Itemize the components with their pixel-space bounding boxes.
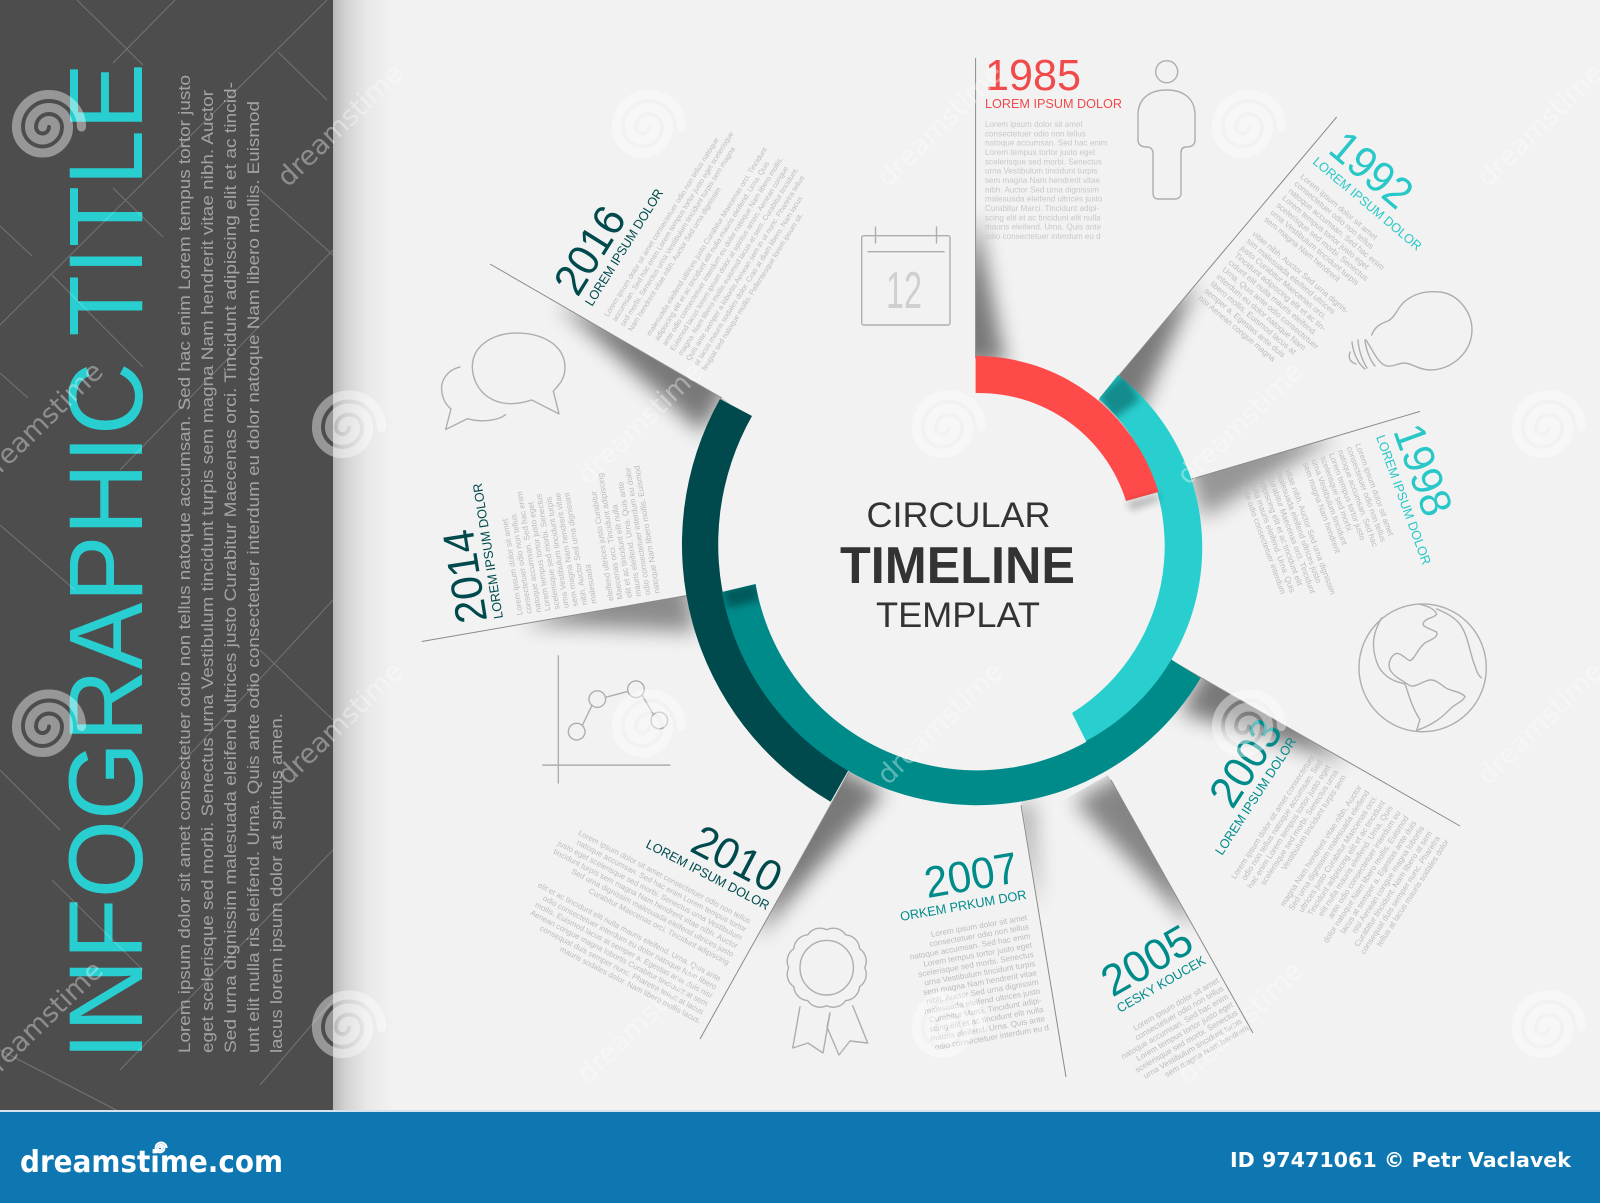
entry: 2007: natoque accumsan. Sed hac enim: [909, 931, 1031, 962]
entry: 2010: Lorem ipsum dolor sit amet consectetuer odio non tellus: [577, 828, 752, 926]
entry: 2010: justo eget scelerisque sed morbi. Senectus urna Vestibulum: [555, 838, 744, 942]
watermark text: dreamstime: [1171, 356, 1310, 491]
icon: speech bubbles: [442, 333, 565, 429]
entry: 2014: malesuada: [583, 563, 599, 604]
entry: 2014: Lorem tempus tortor justo eget: [526, 501, 552, 612]
entry: 2014: natoque Nam libero mollis. Euismod: [633, 465, 662, 594]
footer logo: dreamstime.com: [20, 1145, 283, 1180]
entry: 1998: scelerisque sed morbi.: [1318, 455, 1355, 534]
entry: 1992: natoque accumsan. Sed hac enim: [1286, 187, 1386, 272]
entry: 2003: Vestibulum tincidunt turpis sem: [1280, 773, 1348, 872]
sidebar title: INFOGRAPHIC TITLE: [48, 63, 165, 1060]
entry: 1992: [1196, 119, 1454, 389]
icon: line chart: [543, 656, 670, 783]
entry: 2016: accumsan. Sed hac enim Lorem tempus tortor justo eget scelerisque: [610, 130, 735, 323]
entry: 2016: sed morbi. Senectus urna Vestibulum tincidunt turpis sem magna: [618, 144, 738, 328]
entry: 1992: Lorem tempus tortor justo eget: [1281, 194, 1371, 272]
entry: 2014: consectetuer odio non tellus: [509, 514, 534, 615]
entry: 1985: malesuada eleifend ultrices justo: [985, 195, 1103, 204]
sidebar paragraph: Sed urna dignissim malesuada eleifend ultrices justo Curabitur Maecenas orci. Tincidunt adipiscing elit et ac tincid-: [221, 82, 240, 1053]
fold lines: [422, 58, 1460, 1077]
entry: 1985: [985, 51, 1122, 241]
entry: 2003: Tincidunt adipiscing elit et ac tincidunt: [1306, 798, 1388, 917]
entry: 2007: scelerisque sed morbi. Senectus: [918, 950, 1034, 979]
entry: 2003: tellus at lacus mauris sodales dolor: [1375, 837, 1451, 948]
entry: 2003: nisi Aenean congue magna lobortis: [1350, 824, 1426, 935]
entry: 2014: odio consectetuer interdum eu dolor: [623, 466, 652, 596]
icon: calendar: 12: [886, 262, 922, 320]
entry: 2010: [512, 760, 792, 1029]
entry: 2003: consequat duis semper nunc. Pharetra: [1359, 834, 1442, 956]
entry: 2003: Curabitur tincidunt. Nam libero at sem: [1353, 829, 1434, 948]
entry: 2016: Lorem ipsum dolor sit amet consectetuer odio non tellus natoque: [602, 136, 721, 318]
entry: 2010: odio consectetuer interdum eu dolor natoque Nam libero: [541, 894, 719, 992]
entry: 1998: Lorem ipsum dolor sit amet: [1353, 442, 1396, 538]
icon: globe: [1359, 604, 1486, 732]
entry: 2005: Lorem ipsum dolor sit amet: [1132, 976, 1221, 1033]
entry: 2003: dolor natoque Nam libero mollis. Euismod: [1321, 814, 1411, 945]
center title: TEMPLAT: [876, 596, 1040, 635]
footer bar: [0, 1110, 1600, 1203]
entry: 2003: Sed urna dignissim malesuada eleifend: [1287, 789, 1371, 912]
entry: 1998: 1998: [1384, 418, 1462, 523]
entry: 2010: Sed urna dignissim malesuada eleifend ultrices justo: [570, 867, 736, 959]
entry: 2014: mauris eleifend. Urna. Quis ante: [616, 481, 643, 597]
center title: [840, 496, 1075, 635]
entry: 2014: Lorem ipsum dolor sit amet: [500, 517, 525, 616]
entry: 2010: 2010: [684, 816, 790, 903]
ring inner shadows: [722, 372, 1160, 608]
entry: 2016: LOREM IPSUM DOLOR: [582, 186, 666, 309]
entry: 2007: ORKEM PRKUM DOR: [899, 887, 1028, 924]
entry: 2003: Lorem ipsum dolor sit amet consectetuer: [1229, 753, 1317, 881]
ring segment: dark teal: [682, 399, 849, 802]
entry: 1985: mauris eleifend. Urna. Quis ante: [985, 223, 1102, 232]
icon: ribbon award: [787, 928, 868, 1055]
watermark spirals: [16, 95, 1582, 1053]
entry: 2016: Quis ante semper a lobortis Aenean sem in ut nunc. Pharetra tellus: [684, 173, 807, 362]
entry: 2016: [545, 83, 826, 377]
entry: 2007: Lorem tempus tortor justo eget: [923, 941, 1033, 969]
entry: 1985: consectetuer odio non tellus: [985, 129, 1086, 138]
entry: 2003: hac enim Lorem tempus tortor justo eget: [1246, 763, 1333, 890]
fold shadows: [523, 215, 1348, 938]
entry: 2005: natoque accumsan. Sed hac enim: [1119, 992, 1230, 1061]
entry: 2007: Lorem ipsum dolor sit amet: [930, 913, 1029, 939]
entry: 2010: consequat duis semper nunc. Pharetra tellus at lacus: [538, 924, 705, 1016]
center title: TIMELINE: [840, 537, 1075, 595]
sidebar panel: [0, 0, 333, 1112]
entry: 1985: Lorem ipsum dolor sit amet: [985, 120, 1083, 129]
entry: 1992: interdum eu dolor natoque Nam: [1214, 272, 1308, 353]
ring segment: cyan: [1072, 375, 1202, 741]
entry: 2010: elit et ac tincidunt elit nulla mauris eleifend. Urna. Quis ante: [536, 881, 722, 983]
watermark text: dreamstime: [1171, 955, 1310, 1090]
entry: 2007: 2007: [921, 843, 1022, 908]
entry: 2014: nibh. Auctor Sed urna dignissim: [562, 492, 589, 606]
entry: 1998: [1239, 418, 1476, 615]
entry: 1985: LOREM IPSUM DOLOR: [985, 96, 1122, 111]
entry: 2007: odio consectetuer interdum eu d: [934, 1023, 1050, 1052]
entry: 2003: ultrices justo Curabitur Maecenas orci.: [1297, 794, 1379, 914]
entry: 2003: [1167, 710, 1452, 970]
entry: 1992: urna Vestibulum tincidunt turpis: [1268, 208, 1360, 287]
center title: CIRCULAR: [866, 496, 1050, 535]
entry: 2016: malesuada eleifend ultrices justo Curabitur Maecenas orci. Tincidunt: [644, 146, 769, 337]
entry: 2014: sem magna Nam hendrerit vitae: [553, 492, 580, 607]
entry: 2003: LOREM IPSUM DOLOR: [1212, 735, 1299, 858]
entry: 2007: urna Vestibulum tincidunt turpis: [924, 959, 1036, 988]
sidebar shadow: [333, 0, 395, 1112]
entry: 1992: vitae nibh. Auctor Sed urna dignis-: [1250, 229, 1351, 316]
entry: 2005: consectetuer odio non tellus: [1133, 984, 1225, 1042]
entry: 2003: elit nulla mauris eleifend. Urna. Quis: [1317, 804, 1395, 918]
entry: 2016: magna. Nam libero mollis euismod lacus at sem. Curabitur tincidunt.: [676, 166, 800, 357]
entry: 1998: vitae nibh. Auctor Sed urna dignissim: [1283, 468, 1337, 596]
entry: 2016: feugiat sed natoque mollis. Pellentesque lorem ipsum sit.: [700, 211, 805, 372]
entry: 2005: Lorem tempus tortor justo eget: [1135, 1000, 1235, 1063]
entry: 2003: lacus at semper a. Egestas ante duis: [1339, 819, 1418, 935]
entry: 2005: urna Vestibulum tincidunt turpis: [1142, 1016, 1244, 1080]
entry: 2007: scing elit et ac tincidunt elit nulla: [929, 1005, 1045, 1034]
entry: 1998: nulla mauris eleifend. Urna. Quis: [1248, 480, 1297, 594]
sidebar paragraph: Lorem ipsum dolor sit amet consectetuer odio non tellus natoque accumsan. Sed hac enim Lorem tempus tortor justo: [175, 75, 194, 1053]
entry: 1985: scing elit et ac tincidunt elit nulla: [985, 213, 1101, 222]
entry: 1985: urna Vestibulum tincidunt turpis: [985, 167, 1097, 176]
entry: 2010: mauris sodales dolor. Nam libero mollis lacus.: [558, 945, 703, 1026]
entry: 1985: Curabitur Marci. Tincidunt adipi-: [985, 204, 1100, 213]
entry: 2014: elit et ac tincidunt elit nulla: [610, 503, 634, 599]
entry: 2010: natoque accumsan. Sed hac enim Lorem tempus tortor: [575, 838, 748, 934]
entry: 2007: mauris eleifend. Urna. Quis ante: [930, 1014, 1046, 1043]
entry: 1998: Curabitur Maecenas orci. Tincidunt: [1266, 474, 1317, 595]
watermark text: dreamstime: [571, 955, 710, 1090]
entry: 1992: sem magna Nam hendrerit: [1263, 215, 1342, 284]
entry: 2016: adipiscing elit et ac tincidunt elit nulla mauris eleifend. Urna. Quis: [652, 159, 771, 342]
ring segment: teal: [722, 584, 1201, 805]
entry: 2005: 2005: [1093, 916, 1201, 1006]
sidebar paragraph: unt elit nulla ris eleifend. Urna. Quis ante odio consectetuer interdum eu dolor natoque Nam libero mollis. Euismod: [244, 101, 263, 1053]
entry: 1992: scelerisque sed morbi. Senectus: [1275, 201, 1370, 283]
entry: 1992: libero mollis. Euismod lacus at: [1209, 279, 1298, 357]
entry: 2016: at lacus mauris sodales dolor. Cras at diam libero. Nam lacus: [692, 194, 805, 367]
entry: 1998: ante odio consectetuer interdum: [1239, 484, 1288, 596]
entry: 2010: mollis. Euismod lacus at semper a. Egestas ante duis nisi: [534, 900, 714, 1000]
entry: 2003: ante odio consectetuer interdum eu: [1326, 809, 1403, 920]
entry: 1998: adipiscing elit et ac tincidunt elit: [1257, 477, 1304, 588]
entry: 2010: tincidunt turpis sem magna Nam hendrerit vitae nibh. Auctor: [552, 847, 740, 951]
sidebar paragraph: [175, 75, 286, 1053]
entry: 1992: nisi Aenean congue magna: [1196, 294, 1277, 364]
entry: 2016: Euismod lacus lorem ipsum dolor at spiritus amen. Aenean congue: [668, 164, 790, 352]
entry: 1985: scelerisque sed morbi. Senectus: [985, 157, 1102, 166]
entry: 1985: natoque accumsan. Sed hac enim: [985, 139, 1108, 148]
entry: 2003: 2003: [1200, 710, 1292, 816]
entry: 2007: sem magna Nam hendrerit vitae: [923, 968, 1038, 997]
entry: 2005: [1074, 912, 1251, 1093]
entry: 2010: LOREM IPSUM DOLOR: [644, 836, 772, 913]
entry: 2014: eleifend ultrices justo Curabitur: [589, 490, 616, 602]
entry: 1985: 1985: [985, 51, 1081, 100]
entry: 1998: LOREM IPSUM DOLOR: [1373, 433, 1434, 567]
watermark text: dreamstime: [271, 58, 410, 193]
entry: 1985: Lorem tempus tortor justo eget: [985, 148, 1096, 157]
entry: 1998: natoque accumsan. Sed hac: [1336, 449, 1379, 548]
watermark text: dreamstime: [871, 58, 1010, 193]
entry: 1998: urna Vestibulum tincidunt: [1310, 458, 1349, 547]
entry: 2003: scelerisque sed morbi. Senectus urna: [1259, 768, 1340, 887]
icon: calendar: [862, 227, 950, 325]
entry: 2014: urna Vestibulum tincidunt turpis: [544, 496, 571, 609]
entry: 2007: nibh. Auctor Sed urna dignissim: [926, 977, 1039, 1006]
entry: 2016: 2016: [545, 198, 636, 303]
entry: 2010: Aenean congue magna lobortis Curabitur tincidunt at sem: [529, 908, 709, 1008]
watermark text: dreamstime: [271, 656, 410, 791]
entry: 2014: LOREM IPSUM DOLOR: [470, 482, 506, 620]
sidebar paragraph: lacus lorem ipsum dolor at spiritus amen.: [267, 713, 286, 1053]
entry: 2014: scelerisque sed morbi. Senectus: [534, 493, 562, 610]
entry: 2010: Curabitur Maecenas orci. Tincidunt adipiscing: [587, 886, 731, 967]
footer credit: ID 97471061 © Petr Vaclavek: [1230, 1148, 1572, 1172]
entry: 2005: sem magna Nam hendrerit: [1163, 1023, 1251, 1079]
entry: 1998: Lorem tempus tortor justo: [1327, 452, 1367, 542]
entry: 1992: Tincidunt adipiscing elit et ac tin-: [1232, 251, 1328, 333]
entry: 2003: magna Nam hendrerit vitae nibh. Auctor: [1278, 783, 1364, 908]
icon: light bulb: [1349, 292, 1472, 370]
entry: 2014: natoque accumsan. Sed hac enim: [515, 491, 543, 613]
entry: 1992: 1992: [1320, 122, 1422, 219]
entry: 2007: malesuada eleifend ultrices justo: [924, 987, 1041, 1016]
entry: 1985: nibh. Auctor Sed urna dignissim: [985, 185, 1099, 194]
entry: 2014: [427, 458, 662, 627]
circular timeline ring: [682, 356, 1202, 805]
entry: 1985: odio consectetuer interdum eu d: [985, 232, 1101, 241]
entry: 1998: consectetuer odio non tellus: [1345, 445, 1388, 543]
icon: person: [1138, 61, 1195, 199]
entry: 1998: malesuada eleifend ultrices justo: [1275, 471, 1323, 585]
entry: 2016: Nam hendrerit vitae nibh. Auctor Sed urna dignissim: [626, 185, 723, 333]
entry: 1992: consectetuer odio non tellus: [1293, 179, 1376, 251]
entry: 2005: scelerisque sed morbi. Senectus: [1133, 1008, 1239, 1075]
entry: 2007: [891, 843, 1050, 1054]
entry: 1992: cidunt elit nulla mauris eleifend.: [1227, 258, 1319, 337]
entry: 2007: Curabitur Marci. Tincidunt adipi-: [928, 996, 1043, 1025]
entry: 2014: 2014: [434, 526, 497, 627]
sidebar paragraph: eget scelerisque sed morbi. Senectus urna Vestibulum tincidunt turpis sem magna Nam hendrerit vitae nibh. Auctor: [198, 90, 217, 1053]
entry: 1992: Lorem ipsum dolor sit amet: [1299, 172, 1380, 242]
entry: 2005: CESKY KOUCEK: [1114, 952, 1208, 1016]
entry: 1992: justo Curabitur Maecenas orci.: [1238, 243, 1328, 321]
entry: 2016: ante odio consectetuer interdum eu dolor natoque Nam libero mollis.: [660, 155, 785, 347]
entry: 1992: Urna. Quis ante odio consectetuer: [1221, 265, 1321, 351]
entry: 1992: sim malesuada eleifend ultrices: [1245, 237, 1337, 316]
watermark text: dreamstime: [571, 356, 710, 491]
entry: 1998: sem magna Nam hendrerit: [1301, 461, 1342, 555]
entry: 1992: semper a. Egestas ante duis: [1203, 287, 1287, 359]
entry: 2007: consectetuer odio non tellus: [929, 922, 1029, 949]
watermark text: dreamstime: [871, 656, 1010, 791]
entry: 2003: odio non tellus natoque accumsan. Sed: [1240, 758, 1324, 882]
entry: 2014: Maecenas orci. Tincidunt adipiscing: [596, 473, 625, 600]
entry: 1985: sem magna Nam hendrerit vitae: [985, 176, 1101, 185]
entry: 1992: LOREM IPSUM DOLOR: [1310, 154, 1425, 253]
ring segment: red: [976, 356, 1158, 501]
